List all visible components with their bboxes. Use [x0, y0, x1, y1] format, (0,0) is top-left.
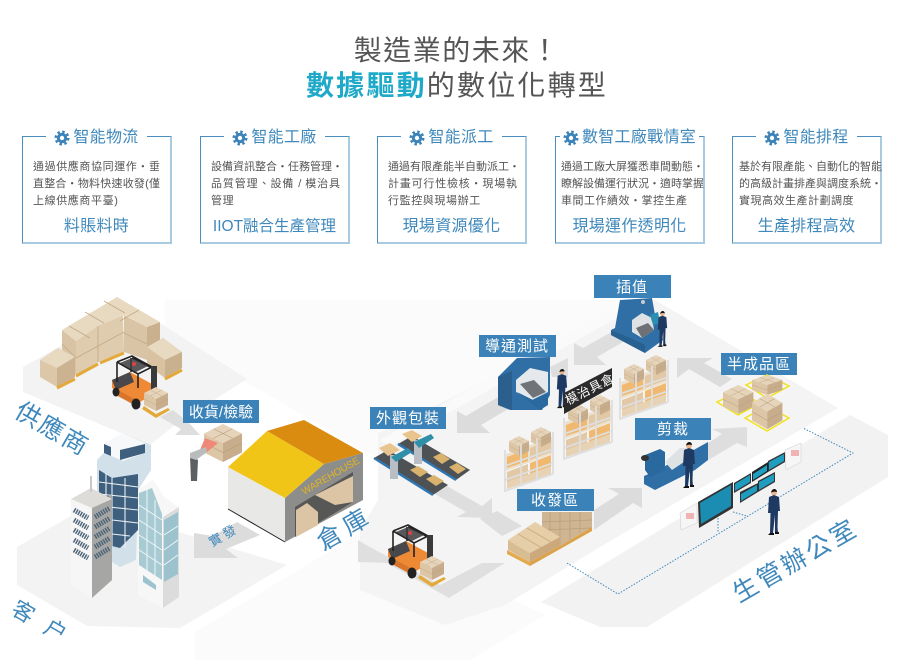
- office boundary: [567, 428, 853, 594]
- operator: milling station: [658, 311, 667, 347]
- text: smart scheduling description: 實現高效生產計劃調度: [739, 195, 854, 207]
- label: production office: 生管辦公室: [728, 514, 863, 608]
- arrow: dispatch approach: [480, 511, 522, 536]
- text: smart logistics description: 直整合‧物料快速收發(僅: [33, 178, 160, 190]
- text: smart scheduling description: [739, 160, 882, 207]
- result: smart logistics: 料賬料時: [64, 218, 129, 235]
- label: semi-finished area: [721, 353, 797, 375]
- manager figure: [768, 489, 780, 535]
- label: continuity test: [479, 335, 556, 357]
- label: packaging: 外觀包裝: [376, 410, 440, 427]
- storage rack: upper: [620, 355, 668, 420]
- floor: customer zone: [17, 505, 287, 628]
- storage rack: middle: [564, 395, 612, 460]
- arrow: forklift route: [358, 540, 505, 598]
- text: smart logistics description: 上線供應商平臺): [33, 195, 118, 207]
- dashboard screens: [698, 452, 785, 528]
- text: smart dispatch description: [388, 160, 520, 207]
- warehouse: WAREHOUSE: [300, 455, 362, 498]
- label: tooling warehouse: 模治具倉: [563, 370, 617, 408]
- forklift: warehouse: [388, 525, 446, 587]
- icon: barcode scanner: [190, 438, 218, 481]
- panel: smart dispatch: [377, 136, 527, 244]
- text: digital war room description: 瞭解設備運行狀況‧適時掌握: [561, 178, 704, 190]
- storage rack: lower: [505, 427, 553, 492]
- label: semi-finished area: 半成品區: [727, 356, 791, 373]
- heading: smart logistics: [46, 128, 147, 146]
- continuity test machine: [498, 357, 550, 410]
- text: smart logistics description: [33, 160, 160, 207]
- label: dispatch area: [517, 489, 594, 511]
- label: cutting: [635, 418, 711, 440]
- floor: pale lower area: [195, 530, 545, 660]
- receiving box: [204, 424, 242, 462]
- arrow: cutting to semi-finished: [690, 427, 747, 465]
- label: continuity test: 導通測試: [485, 338, 549, 355]
- text: smart factory description: [211, 160, 343, 207]
- heading: smart scheduling: [756, 128, 857, 146]
- result: smart factory: IIOT融合生產管理: [213, 218, 336, 235]
- label: milling: 插值: [616, 279, 648, 296]
- floor: office zone: [541, 415, 888, 627]
- heading: smart factory: [224, 128, 325, 146]
- supplier boxes: [40, 297, 182, 388]
- label: warehouse: 倉庫: [312, 502, 378, 556]
- text: digital war room description: 車間工作績效‧掌控生產: [561, 195, 688, 207]
- arrow: milling to test: [574, 330, 630, 365]
- semi-finished pallets: [717, 375, 789, 431]
- heading: digital war room: 數智工廠戰情室: [582, 129, 696, 146]
- floor: supplier zone: [23, 323, 247, 445]
- arrow: supplier to receiving: [160, 410, 200, 435]
- text: smart factory description: 管理: [211, 195, 234, 207]
- text: smart dispatch description: 行監控與現場辦工: [388, 195, 481, 207]
- milling machine: [611, 298, 663, 353]
- panel: digital war room: [555, 136, 705, 244]
- label: packaging: [370, 407, 446, 429]
- label: dispatch area: 收發區: [531, 492, 579, 509]
- arrow: warehouse to customer: [194, 522, 260, 558]
- label: receiving: [183, 400, 259, 423]
- text: digital war room description: [561, 160, 704, 207]
- arrow: racks to packaging: [457, 393, 520, 433]
- result: smart dispatch: 現場資源優化: [403, 218, 500, 235]
- floor: pale upper area: [165, 300, 645, 460]
- cutting machine: [641, 442, 708, 490]
- panel: smart scheduling: [732, 136, 882, 244]
- packaging conveyors: [374, 430, 470, 495]
- label: supplier: 供應商: [10, 397, 94, 462]
- forklift: supplier: [112, 356, 170, 418]
- panel: smart logistics: [22, 136, 172, 244]
- text: smart scheduling description: 基於有限產能、自動化的智能: [739, 161, 882, 173]
- text: smart dispatch description: 計畫可行性檢核‧現場執: [388, 178, 517, 190]
- floor: factory road: [380, 310, 620, 446]
- text: smart factory description: 品質管理、設備 / 模治具: [211, 178, 340, 190]
- label: cutting: 剪裁: [657, 421, 689, 438]
- text: smart factory description: 設備資訊整合‧任務管理‧: [211, 161, 343, 173]
- arrow: small test feed: [550, 358, 568, 377]
- label: customer: 客户: [8, 596, 84, 654]
- label: milling: [594, 275, 671, 298]
- operator: test station: [557, 369, 567, 408]
- text: smart scheduling description: 的高級計畫排產與調度系統‧: [739, 178, 882, 190]
- heading: smart dispatch: [401, 128, 502, 146]
- arrow: semi-finished to milling: [677, 358, 732, 387]
- label: shipping: 實發: [206, 521, 241, 550]
- heading: smart factory: 智能工廠: [251, 129, 317, 146]
- heading: smart dispatch: 智能派工: [428, 129, 494, 146]
- title: 製造業的未來！: [354, 35, 560, 66]
- operator: cutting station: [683, 442, 695, 488]
- customer towers: [71, 433, 179, 608]
- floor: factory zone: [360, 300, 838, 625]
- heading: smart scheduling: 智能排程: [783, 129, 849, 146]
- heading: smart logistics: 智能物流: [73, 129, 139, 146]
- text: smart dispatch description: 通過有限產能半自動派工‧: [388, 161, 520, 173]
- wall chart: right: [785, 443, 801, 470]
- arrow: dispatch to cutting: [594, 488, 642, 530]
- text: digital war room description: 通過工廠大屏獲悉車間動態‧: [561, 161, 704, 173]
- panel: smart factory: [200, 136, 350, 244]
- result: smart scheduling: 生產排程高效: [758, 218, 855, 235]
- wall chart: left: [680, 503, 697, 530]
- dispatch pallets: [507, 512, 592, 566]
- result: digital war room: 現場運作透明化: [572, 218, 687, 235]
- label: receiving: 收貨/檢驗: [189, 403, 253, 421]
- arrow: packaging to dispatch area: [435, 485, 492, 518]
- text: smart logistics description: 通過供應商協同運作‧垂: [33, 161, 160, 173]
- warehouse: [228, 420, 363, 542]
- subtitle: 數據驅動的數位化轉型: [306, 70, 608, 101]
